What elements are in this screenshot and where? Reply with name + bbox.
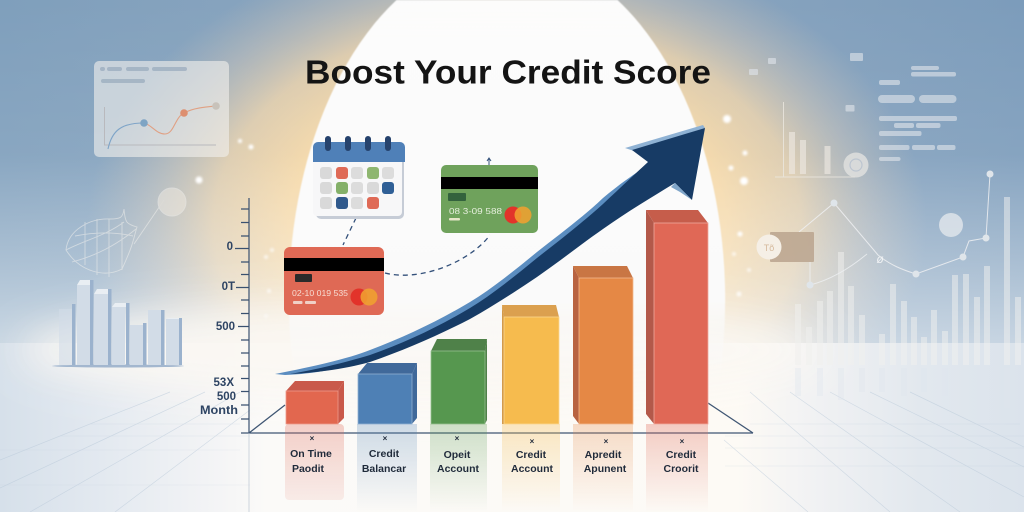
label: Credit Account: Account bbox=[511, 463, 554, 475]
icon: red credit card: 02-10 019 535 bbox=[292, 288, 348, 298]
bar 5: orange bbox=[573, 266, 633, 424]
label: Apredit Apunent: × bbox=[604, 437, 608, 446]
axis label: Month: Month bbox=[200, 405, 238, 417]
label: Credit Croorit: Credit bbox=[666, 449, 697, 461]
label: Credit Balancar: Balancar bbox=[362, 463, 406, 475]
panel: left line chart card bbox=[94, 61, 229, 157]
axis label: 0T: 0T bbox=[222, 281, 235, 293]
sparkles bbox=[196, 115, 751, 318]
bar chart: left faded bars bbox=[52, 280, 184, 368]
label: Opeit Account: Opeit bbox=[444, 449, 471, 461]
label: Credit Balancar: × bbox=[383, 434, 387, 443]
axis label: 53X: 53X bbox=[214, 377, 234, 389]
axis label: 0: 0 bbox=[227, 241, 233, 253]
axis: vertical and baseline bbox=[200, 198, 753, 512]
glow ellipse bbox=[289, 0, 726, 334]
axis label: 500 upper month: 500 bbox=[217, 391, 236, 403]
label: Credit Balancar: Credit bbox=[369, 448, 400, 460]
bar 1: red bbox=[286, 381, 344, 424]
bar 3: green bbox=[431, 339, 487, 424]
label: On Time Paodit: Paodit bbox=[292, 463, 325, 475]
axis label: 500: 500 bbox=[216, 321, 235, 333]
chart: right line graph: Tõ bbox=[764, 243, 774, 253]
icon: red credit card bbox=[284, 247, 384, 315]
label: Credit Croorit: Croorit bbox=[664, 463, 699, 475]
label: Credit Account: × bbox=[530, 437, 534, 446]
icon: calendar bbox=[313, 136, 405, 219]
icon: green credit card bbox=[441, 158, 538, 233]
icon: green credit card: 08 3-09 588 bbox=[449, 206, 502, 216]
label: Credit Account: Credit bbox=[516, 449, 547, 461]
category labels bbox=[290, 434, 699, 475]
label: Opeit Account: Account bbox=[437, 463, 480, 475]
label: Apredit Apunent: Apunent bbox=[584, 463, 627, 475]
bar 4: yellow bbox=[502, 305, 559, 424]
bar 2: blue bbox=[358, 363, 417, 424]
label: Credit Croorit: × bbox=[680, 437, 684, 446]
label: Apredit Apunent: Apredit bbox=[585, 449, 622, 461]
panel: top right text lines bbox=[749, 53, 957, 161]
chart: right line graph: ø bbox=[876, 252, 884, 266]
connector: dashed lines bbox=[343, 218, 490, 275]
icon: left globe mesh bbox=[66, 188, 186, 277]
floor bbox=[0, 343, 1024, 512]
title: Boost Your Credit Score bbox=[305, 54, 711, 90]
label: On Time Paodit: × bbox=[310, 434, 314, 443]
label: On Time Paodit: On Time bbox=[290, 448, 332, 460]
bar chart: main bars bbox=[286, 210, 708, 424]
arrow: growth curve bbox=[275, 125, 705, 375]
label: Opeit Account: × bbox=[455, 434, 459, 443]
bar 6: red bbox=[646, 210, 708, 424]
bar chart: top right mini chart bbox=[775, 102, 868, 178]
bar reflections bbox=[285, 424, 708, 512]
chart: right line graph bbox=[756, 170, 1021, 408]
